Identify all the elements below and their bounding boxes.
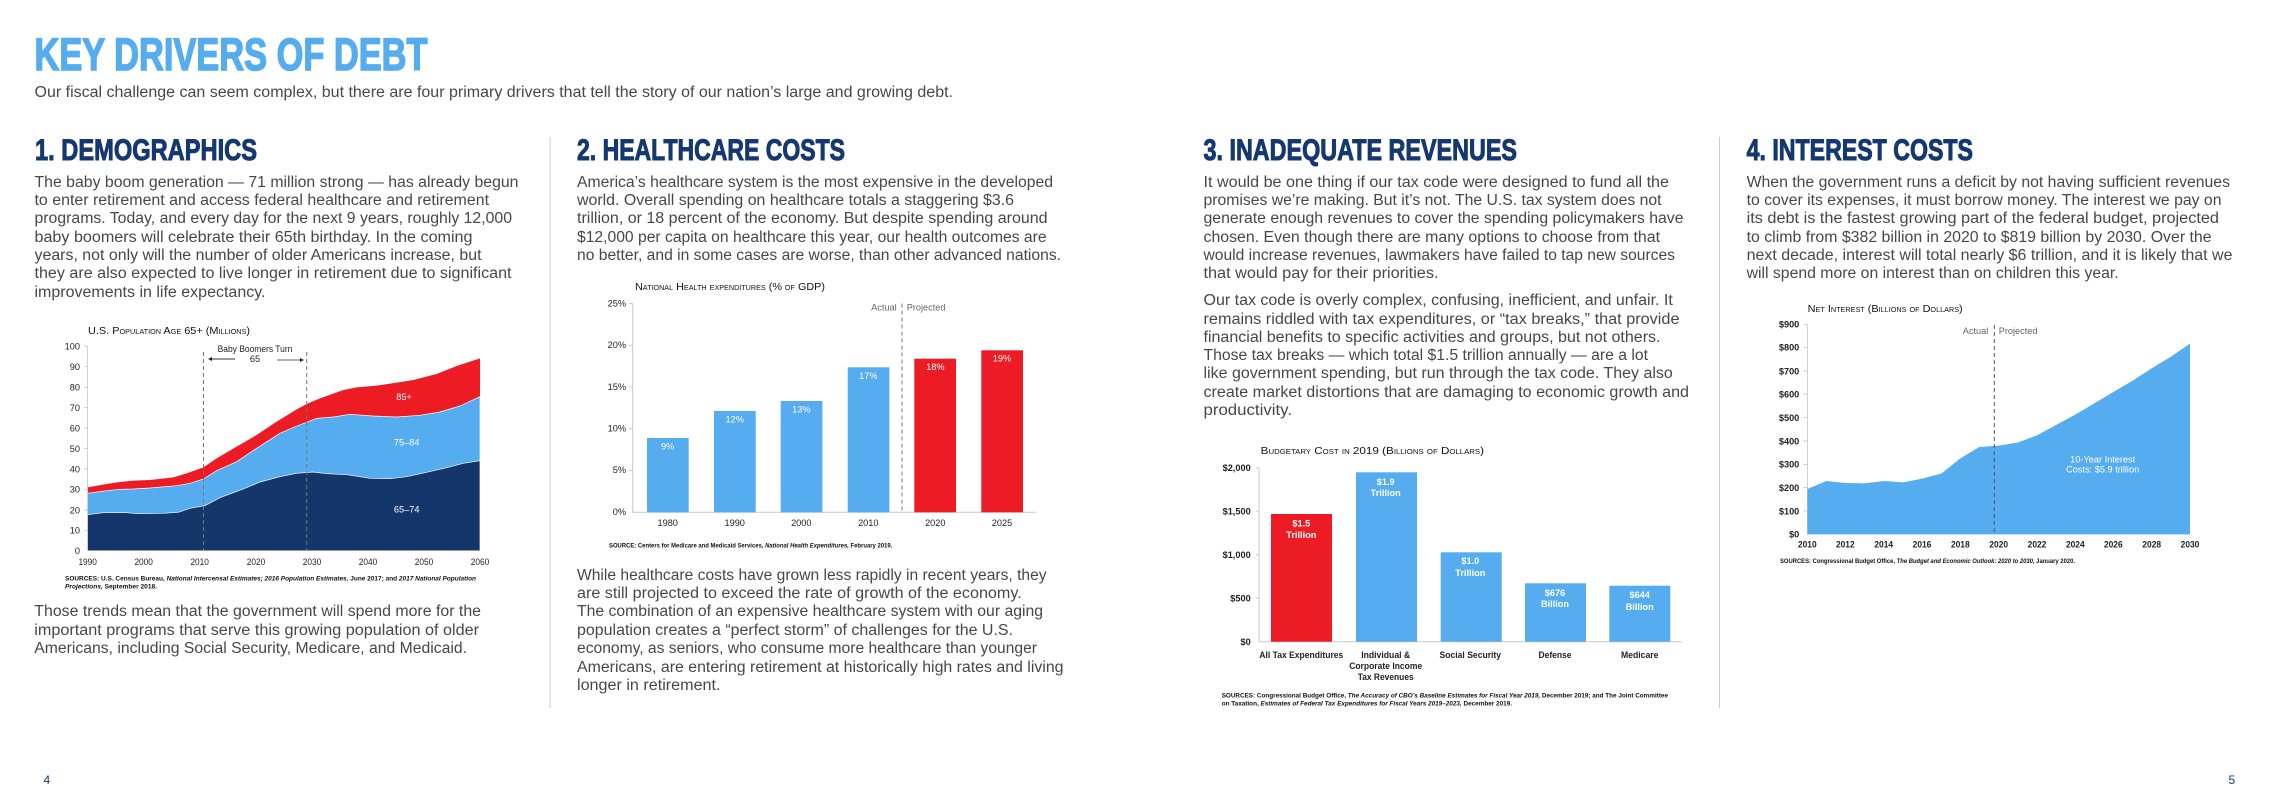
heading: demographics: 1. DEMOGRAPHICS [35,134,257,167]
y axis labels: $1,500 [1223,506,1251,516]
y axis labels [608,299,626,517]
text block: demographics conclusion: Those trends mean that the government will spend more for the [34,603,481,620]
x axis labels: Medicare [1621,650,1658,660]
text block: healthcare conclusion: longer in retirement. [577,677,720,694]
y axis labels: 80 [70,383,80,393]
x axis labels: 2040 [359,557,377,567]
x axis labels: Tax Revenues [1358,672,1414,682]
bar value labels: 12% [726,415,744,425]
text block: revenues second paragraph [1204,292,1689,419]
x axis labels: 2014 [1874,539,1894,549]
text block: interest costs: its debt is the fastest growing part of the federal budget, projected [1747,210,2219,227]
y axis labels [1779,320,1799,540]
chart: budgetary cost in 2019 [1222,445,1682,708]
y axis labels: $800 [1779,343,1799,353]
chart title: Budgetary Cost in 2019 (Billions of Dollars) [1261,445,1484,457]
y axis labels: $500 [1230,594,1251,604]
source note [1222,693,1668,708]
x axis labels: 2024 [2066,539,2085,549]
actual / projected divider: Projected [1999,326,2038,336]
area callout: 10-Year Interest [2070,455,2136,465]
baby boomers annotation [204,344,307,550]
text block: demographics intro [34,174,518,301]
y axis labels: $200 [1779,483,1799,493]
panel: inadequate revenues [1202,134,1689,708]
bar value labels [1286,477,1654,612]
actual / projected divider: Projected [907,303,946,313]
bar value labels: $676 [1545,588,1565,598]
source note: SOURCES: Congressional Budget Office, The Budget and Economic Outlook: 2020 to 2030, January 2020. [1780,558,2075,565]
text block: demographics intro: baby boomers will celebrate their 65th birthday. In the coming [34,229,473,246]
heading: inadequate revenues: 3. INADEQUATE REVENUES [1204,134,1517,167]
y axis labels: 10% [608,424,626,434]
x axis labels: 2010 [858,518,879,528]
y axis labels: $900 [1779,320,1799,330]
bar value labels: 17% [859,371,877,381]
panel: interest costs [1746,134,2232,565]
text block: healthcare intro: trillion, or 18 percent of the economy. But despite spending around [577,210,1048,227]
bar value labels: Billion [1541,599,1569,609]
page number right: 5 [2228,773,2236,787]
x axis labels: 2022 [2028,539,2046,549]
label 65-74: 65–74 [394,505,419,515]
y axis labels: 25% [608,299,626,309]
text block: interest costs: will spend more on interest than on children this year. [1746,265,2119,282]
x axis labels: 2026 [2104,539,2123,549]
text block: demographics intro: years, not only will the number of older Americans increase, but [34,247,482,264]
bar value labels: 18% [926,362,944,372]
y axis labels: $500 [1779,413,1799,423]
text block: healthcare conclusion: economy, as seniors, who consume more healthcare than younger [577,640,1037,657]
bar value labels: 9% [661,442,674,452]
text block: demographics conclusion: Americans, including Social Security, Medicare, and Medicaid. [34,640,467,657]
x axis labels: 2020 [1989,539,2008,549]
x axis labels: 2060 [471,557,489,567]
bar value labels [661,354,1011,452]
chart: U.S. population age 65+ [65,325,489,591]
text block: healthcare conclusion [577,567,1064,694]
actual / projected divider [871,303,946,512]
text block: healthcare conclusion: Americans, are entering retirement at historically high rates and living [577,659,1064,676]
bar value labels: Billion [1626,602,1654,612]
text block: revenues second paragraph: Our tax code is overly complex, confusing, inefficient, and unfair. It [1204,292,1674,309]
y axis labels [65,341,80,556]
x axis labels: 2025 [992,518,1012,528]
stacked areas [84,346,480,551]
y axis labels: 20% [608,340,626,350]
text block: revenues first paragraph: promises we’re making. But it’s not. The U.S. tax system does not [1204,192,1662,209]
y axis labels: $1,000 [1223,550,1251,560]
y axis labels: $300 [1779,460,1799,470]
y axis labels: 40 [70,464,80,474]
y axis labels: $400 [1779,436,1799,446]
bar value labels: Trillion [1286,530,1317,540]
heading: interest costs: 4. INTEREST COSTS [1747,134,1973,167]
x axis labels: 1980 [657,518,678,528]
chart title: National Health expenditures (% of GDP) [635,281,825,293]
bar value labels: $644 [1629,590,1651,600]
text block: healthcare intro: no better, and in some cases are worse, than other advanced nations. [577,247,1061,264]
baby boomers annotation: 65 [250,354,260,364]
source note: SOURCES: U.S. Census Bureau, National Intercensal Estimates; 2016 Population Estimates, June 2017; and 2017 National Population [65,576,476,583]
text block: interest costs: When the government runs a deficit by not having sufficient revenues [1747,174,2230,191]
bars [1271,472,1670,642]
text block: revenues first paragraph: It would be one thing if our tax code were designed to fund all the [1204,174,1669,191]
bars [647,350,1023,512]
chart: net interest [1779,303,2199,565]
text block: revenues second paragraph: Those tax breaks — which total $1.5 trillion annually — are a lot [1204,347,1649,364]
bar value labels: $1.5 [1292,519,1310,529]
text block: healthcare intro: $12,000 per capita on healthcare this year, our health outcomes are [577,229,1047,246]
label 75-84: 75–84 [394,438,419,448]
chart title: U.S. Population Age 65+ (Millions) [88,325,250,337]
y axis labels [1223,463,1251,647]
x axis labels: 2012 [1836,539,1855,549]
bar value labels: Trillion [1455,568,1486,578]
text block: interest costs: to climb from $382 billion in 2020 to $819 billion by 2030. Over the [1747,229,2212,246]
area callout [2066,455,2139,475]
text block: revenues first paragraph: that would pay for their priorities. [1204,265,1438,282]
y axis labels: 100 [65,341,80,351]
subtitle: Our fiscal challenge can seem complex, but there are four primary drivers that tell the story of our nation’s large and growing debt. [34,84,953,101]
y axis labels: 90 [70,362,80,372]
y axis labels: 60 [70,423,80,433]
text block: demographics conclusion: important programs that serve this growing population of older [34,622,479,639]
y axis labels: 70 [70,403,80,413]
chart title: Net Interest (Billions of Dollars) [1808,303,1963,315]
y axis labels: 20 [70,505,80,515]
text block: healthcare conclusion: The combination of an expensive healthcare system with our aging [577,603,1043,620]
text block: revenues second paragraph: productivity. [1204,402,1292,419]
x axis labels: 2028 [2142,539,2161,549]
bar value labels: 19% [993,354,1011,364]
x axis labels: 2010 [1798,539,1817,549]
y axis labels: $2,000 [1223,463,1251,473]
x axis labels [657,518,1012,528]
y axis labels: $0 [1240,637,1251,647]
x axis labels: 2030 [2181,539,2199,549]
text block: demographics intro: to enter retirement and access federal healthcare and retirement [34,192,490,209]
x axis labels: 2010 [190,557,209,567]
x axis labels: 2000 [791,518,812,528]
text block: revenues second paragraph: financial benefits to specific activities and groups, but not others. [1204,329,1660,346]
y axis labels: $600 [1779,389,1799,399]
panel: healthcare costs [576,134,1064,694]
text block: revenues second paragraph: like government spending, but run through the tax code. They also [1204,365,1673,382]
x axis labels: 2050 [415,557,433,567]
page number left: 4 [44,773,50,787]
x axis labels: 2030 [303,557,321,567]
x axis labels: Corporate Income [1349,661,1422,671]
text block: revenues first paragraph: generate enough revenues to cover the spending policymakers have [1204,210,1684,227]
y axis labels: 0% [613,507,626,517]
text block: revenues first paragraph: chosen. Even though there are many options to choose from that [1204,229,1661,246]
y axis labels: 15% [608,382,626,392]
panel: demographics [34,134,519,657]
chart: national health expenditures [608,281,1036,550]
y axis labels: 0 [75,546,80,556]
text block: demographics intro: The baby boom generation — 71 million strong — has already begun [34,174,518,191]
x axis labels: 2020 [925,518,946,528]
source note [65,576,476,591]
source note: on Taxation, Estimates of Federal Tax Expenditures for Fiscal Years 2019–2023, December 2019. [1222,701,1512,708]
y axis labels: $0 [1789,530,1799,540]
x axis labels [1798,539,2199,549]
bar value labels: Trillion [1371,488,1401,498]
text block: healthcare conclusion: While healthcare costs have grown less rapidly in recent years, they [577,567,1047,584]
text block: revenues first paragraph [1202,174,1684,282]
source note: Projections, September 2018. [65,584,157,591]
y axis labels: 30 [70,485,80,495]
y axis labels: $100 [1779,506,1799,516]
y axis labels: $700 [1779,366,1799,376]
x axis labels: Defense [1538,650,1572,660]
title: KEY DRIVERS OF DEBT [34,29,428,80]
text block: demographics intro: improvements in life expectancy. [34,284,266,301]
label 85+: 85+ [396,392,412,402]
x axis labels: Social Security [1440,650,1502,660]
bar value labels: 13% [792,405,810,415]
y axis labels: 5% [613,465,626,475]
x axis labels: 1990 [78,557,97,567]
actual / projected divider: Actual [871,303,897,313]
y axis labels: 50 [70,444,80,454]
text block: healthcare intro: world. Overall spending on healthcare totals a staggering $3.6 [576,192,1014,209]
area callout: Costs: $5.9 trillion [2066,465,2139,475]
x axis labels: 2016 [1913,539,1931,549]
x axis labels [1259,650,1658,682]
baby boomers annotation: Baby Boomers Turn [218,344,292,354]
bar value labels: $1.9 [1377,477,1395,487]
text block: revenues first paragraph: would increase revenues, lawmakers have failed to tap new sources [1202,247,1675,264]
source note: SOURCES: Congressional Budget Office, The Accuracy of CBO’s Baseline Estimates for Fiscal Year 2019, December 2019; and The Joint Committee [1222,693,1668,700]
x axis labels: 2018 [1951,539,1970,549]
actual / projected divider [1963,325,2038,534]
text block: healthcare conclusion: population creates a “perfect storm” of challenges for the U.S. [577,622,1013,639]
text block: healthcare intro [576,174,1061,264]
x axis labels: 2000 [134,557,153,567]
text block: demographics intro: they are also expected to live longer in retirement due to significant [34,265,512,282]
x axis labels: 2020 [247,557,265,567]
text block: interest costs [1746,174,2232,282]
area [1803,324,2190,534]
x axis labels: Individual & [1361,650,1411,660]
text block: healthcare intro: America’s healthcare system is the most expensive in the developed [577,174,1053,191]
bar value labels: $1.0 [1461,556,1479,566]
text block: revenues second paragraph: create market distortions that are damaging to economic growth and [1204,384,1689,401]
actual / projected divider: Actual [1963,326,1988,336]
text block: demographics intro: programs. Today, and every day for the next 9 years, roughly 12,000 [34,210,512,227]
source note: SOURCE: Centers for Medicare and Medicaid Services, National Health Expenditures, February 2019. [609,543,892,550]
text block: demographics conclusion [34,603,481,657]
text block: interest costs: next decade, interest will total nearly $6 trillion, and it is likely that we [1747,247,2232,264]
x axis labels: All Tax Expenditures [1259,650,1343,660]
x axis labels: 1990 [724,518,745,528]
x axis labels [78,557,489,567]
heading: healthcare costs: 2. HEALTHCARE COSTS [577,134,845,167]
text block: healthcare conclusion: are still projected to exceed the rate of growth of the economy. [577,585,1022,602]
y axis labels: 10 [70,526,80,536]
text block: revenues second paragraph: remains riddled with tax expenditures, or “tax breaks,” that provide [1204,311,1680,328]
text block: interest costs: to cover its expenses, it must borrow money. The interest we pay on [1747,192,2222,209]
